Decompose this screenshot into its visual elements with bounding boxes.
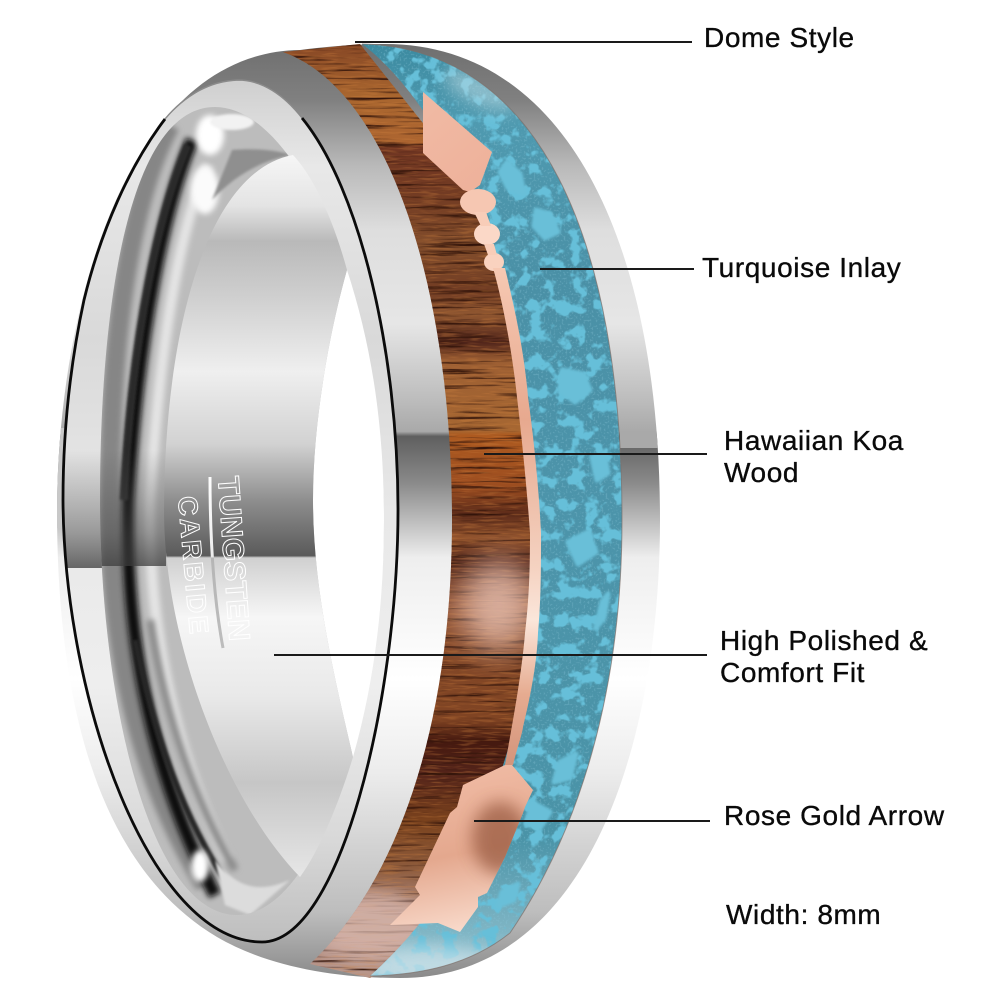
- engraved word TUNGSTEN: TUNGSTEN: [211, 475, 255, 642]
- callout: Dome Style: Dome Style: [704, 22, 855, 53]
- callout: Hawaiian Koa Wood: Wood: [724, 457, 799, 488]
- callout: High Polished & Comfort Fit: High Polished &: [720, 625, 928, 656]
- large turquoise stones: [498, 162, 608, 906]
- arrow shaft: [493, 268, 541, 765]
- outer band silver body: [50, 44, 665, 978]
- turquoise inlay: [362, 44, 622, 976]
- engraving: TUNGSTEN CARBIDE: [172, 475, 255, 648]
- inner opening: [100, 107, 384, 915]
- text: width specification: Width: 8mm: [726, 899, 881, 930]
- Hawaiian koa wood inlay: [283, 44, 530, 978]
- arrow fletching: [390, 765, 533, 932]
- callout: High Polished & Comfort Fit: Comfort Fit: [720, 657, 865, 688]
- inner bevel reflections: [100, 114, 293, 915]
- rose gold arrow: [385, 92, 541, 935]
- callout: Rose Gold Arrow: Rose Gold Arrow: [724, 800, 945, 831]
- fletching shadow: [472, 802, 528, 874]
- arrow beads: [460, 189, 504, 271]
- see-through hole: [313, 270, 384, 757]
- callout: Turquoise Inlay: Turquoise Inlay: [702, 252, 901, 283]
- inlay edge line: [362, 44, 622, 976]
- bottom pale glare: [371, 938, 487, 976]
- inner wall comfort-fit surface: [164, 155, 353, 877]
- top pale glare: [438, 64, 515, 118]
- callout: Hawaiian Koa Wood: Hawaiian Koa: [724, 425, 904, 456]
- front rim with black seam line: [60, 80, 398, 942]
- callout: High Polished & Comfort Fit: [274, 625, 928, 688]
- arrow head: [423, 92, 492, 192]
- ring illustration: [50, 40, 665, 985]
- callout: Hawaiian Koa Wood: [484, 425, 904, 488]
- engraved divider line: [210, 477, 223, 648]
- engraved word CARBIDE: CARBIDE: [172, 495, 214, 638]
